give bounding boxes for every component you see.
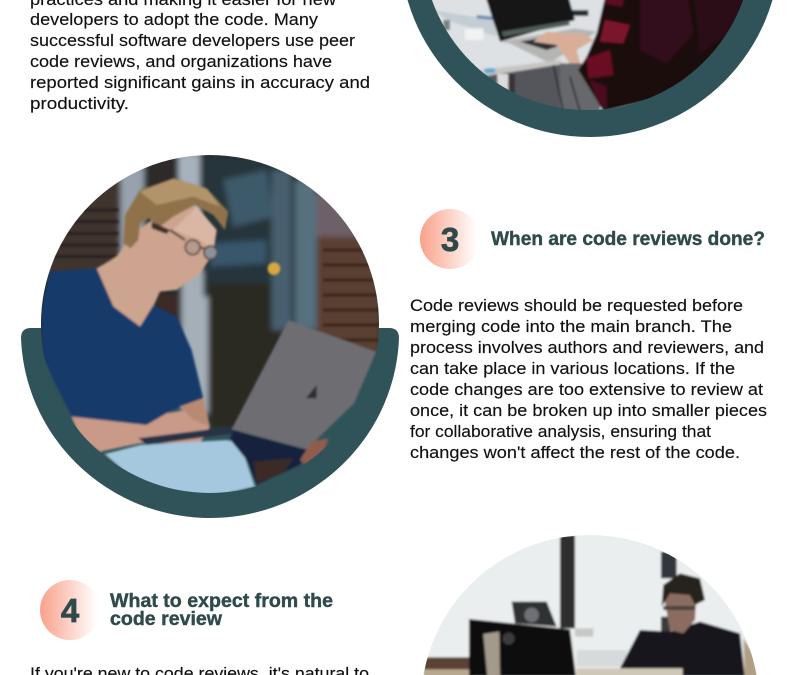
text block: section 2 paragraph	[30, 0, 370, 113]
text block: section 2 paragraph: productivity.	[30, 94, 129, 113]
photo: developer in plaid shirt on teal half ring	[408, 0, 772, 137]
section 3 number badge: 3	[441, 221, 459, 258]
photo: young man with glasses using a laptop on teal half ring	[21, 150, 399, 518]
text block: section 3 paragraph: once, it can be broken up into smaller pieces	[410, 401, 767, 420]
text block: section 2 paragraph: code reviews, and organizations have	[30, 52, 332, 71]
section 4 number badge: 4	[61, 592, 80, 629]
text block: section 3 paragraph: can take place in various locations. If the	[410, 359, 735, 378]
section 4 number badge	[40, 580, 100, 640]
text block: section 3 paragraph	[410, 296, 767, 462]
section 4 heading: What to expect from the	[110, 591, 333, 612]
text block: section 2 paragraph: developers to adopt the code. Many	[30, 10, 319, 29]
text block: section 2 paragraph: successful software developers use peer	[30, 31, 355, 50]
section 3 heading: When are code reviews done?	[491, 229, 765, 250]
text block: section 3 paragraph: for collaborative analysis, ensuring that	[410, 422, 711, 441]
text block: section 3 paragraph: merging code into the main branch. The	[410, 317, 732, 336]
section 3 number badge	[420, 209, 480, 269]
text block: section 3 paragraph: Code reviews should be requested before	[410, 296, 743, 315]
section 4 heading	[110, 591, 333, 630]
photo: man at monitor in bright office	[413, 530, 767, 675]
text block: section 3 paragraph: changes won't affect the rest of the code.	[410, 443, 740, 462]
text block: section 3 paragraph: code changes are too extensive to review at	[410, 380, 763, 399]
section 4 heading: code review	[110, 609, 222, 630]
text block: section 2 paragraph: reported significant gains in accuracy and	[30, 73, 370, 92]
text block: section 3 paragraph: process involves authors and reviewers, and	[410, 338, 764, 357]
